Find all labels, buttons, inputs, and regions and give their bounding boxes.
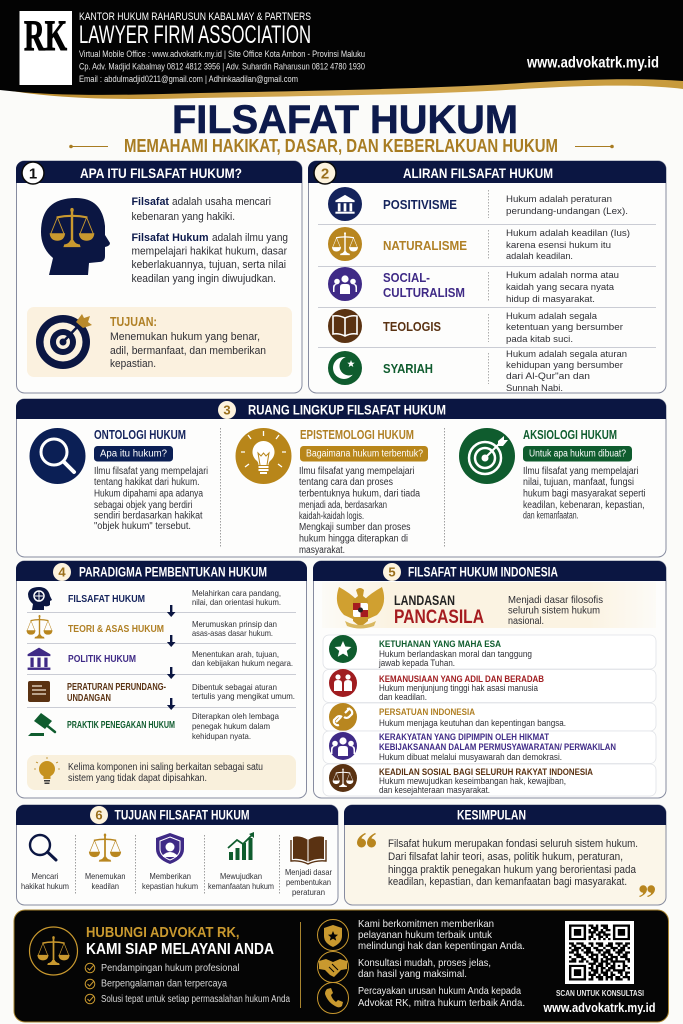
row: praktik penegakan: penegak hukum dalam <box>192 721 270 731</box>
commitment text: dan hasil yang maksimal. <box>358 968 467 980</box>
title: FILSAFAT HUKUM <box>172 98 518 142</box>
conclusion text: Filsafat hukum merupakan fondasi seluruh sistem hukum. <box>388 838 638 850</box>
firm name: KANTOR HUKUM RAHARUSUN KABALMAY & PARTNERS <box>79 11 311 23</box>
sila 5: dan kesejahteraan masyarakat. <box>379 785 490 795</box>
subtitle: MEMAHAMI HAKIKAT, DASAR, DAN KEBERLAKUAN HUKUM <box>124 135 558 156</box>
goal: kepastian hukum: Memberikan <box>150 871 191 881</box>
badge 3 <box>218 401 236 419</box>
definition text: kebenaran yang hakiki. <box>132 211 235 223</box>
row: teori dan asas: Merumuskan prinsip dan <box>192 619 277 629</box>
sila 4 <box>323 731 656 764</box>
sila 5: KEADILAN SOSIAL BAGI SELURUH RAKYAT INDONESIA <box>379 767 593 778</box>
pancasila description: seluruh sistem hukum <box>508 604 600 616</box>
row: politik hukum: dan kebijakan hukum negara. <box>192 658 293 668</box>
row: syariah <box>328 349 627 394</box>
goal: dasar pembentukan: pembentukan <box>286 877 331 887</box>
row: positivisme: perundang-undangan (Lex). <box>506 206 628 217</box>
pancasila description: nasional. <box>508 615 544 627</box>
arrows between rows <box>167 605 176 710</box>
commitment text: Percayakan urusan hukum Anda kepada <box>358 985 521 997</box>
row: naturalisme: adalah keadilan. <box>506 251 573 262</box>
column: ontologi: tentang hakikat dari hukum. <box>94 477 200 488</box>
goal: dasar pembentukan: peraturan <box>292 887 325 897</box>
row: teologis: ketentuan yang bersumber <box>506 322 623 333</box>
column: aksiologi: Ilmu filsafat yang mempelajari <box>523 466 638 477</box>
sila 2 <box>323 669 656 702</box>
note box <box>27 755 296 790</box>
row: peraturan perundang-undangan: PERATURAN PERUNDANG- <box>67 682 166 693</box>
goal: dasar pembentukan: Menjadi dasar <box>285 867 332 877</box>
call to action heading: KAMI SIAP MELAYANI ANDA <box>86 941 274 958</box>
definition text: keadilan yang ingin diwujudkan. <box>132 273 276 285</box>
sila 2: KEMANUSIAAN YANG ADIL DAN BERADAB <box>379 674 544 685</box>
badge 6: 6 <box>95 808 103 822</box>
icon: handshake <box>318 952 348 982</box>
column: aksiologi: hukum bagi masyarakat seperti <box>523 488 646 500</box>
column: epistemologi: Ilmu filsafat yang mempelajari <box>299 466 414 477</box>
column: epistemologi: masyarakat. <box>299 545 345 556</box>
heading: KESIMPULAN <box>457 806 526 822</box>
icon: garuda <box>337 587 384 628</box>
panel 3: ruang lingkup <box>16 399 666 557</box>
row: teologis <box>328 309 623 345</box>
row: filsafat hukum <box>28 587 281 610</box>
definition text: adalah usaha mencari <box>172 196 271 208</box>
heading: FILSAFAT HUKUM INDONESIA <box>408 564 558 580</box>
row: naturalisme: karena esensi hukum itu <box>506 240 611 251</box>
landasan pancasila <box>394 592 484 628</box>
definition text: adalah ilmu yang <box>212 232 288 244</box>
column: epistemologi <box>236 428 428 556</box>
panel 5: filsafat hukum indonesia <box>313 561 666 798</box>
badge 2 <box>314 162 336 184</box>
conclusion text: hingga praktik penegakan hukum yang berorientasi pada <box>388 864 636 876</box>
header band <box>0 0 683 99</box>
conclusion text: keadilan, kepastian, dan kemanfaatan bagi masyarakat. <box>388 876 627 888</box>
note box: Kelima komponen ini saling berkaitan sebagai satu <box>68 762 263 773</box>
sila 1: KETUHANAN YANG MAHA ESA <box>379 639 501 650</box>
goal: kemanfaatan: Mewujudkan <box>220 871 262 881</box>
sila 5 <box>323 764 656 796</box>
row: social-culturalism: SOCIAL- <box>383 270 430 285</box>
column: epistemologi: tentang cara dan proses <box>299 477 393 488</box>
checklist <box>85 963 290 1005</box>
tujuan box: Menemukan hukum yang benar, <box>110 331 260 343</box>
badge 5 <box>383 563 401 581</box>
icon: target <box>36 314 92 369</box>
badge 1: 1 <box>29 166 37 182</box>
row: teori dan asas <box>26 615 277 639</box>
column: aksiologi: keadilan, kebenaran, kepastian, <box>523 500 644 511</box>
panel 6: tujuan filsafat hukum <box>16 805 338 905</box>
row: positivisme: POSITIVISME <box>383 197 457 212</box>
column: ontologi <box>30 428 208 532</box>
row: peraturan perundang-undangan: UNDANGAN <box>67 693 111 704</box>
row: filsafat hukum: nilai, dan orientasi hukum. <box>192 597 281 607</box>
badge 5: 5 <box>388 564 396 580</box>
row: naturalisme: Hukum adalah keadilan (Ius) <box>506 228 630 239</box>
icon: scales circle <box>30 927 78 975</box>
tujuan box: kepastian. <box>110 358 156 370</box>
heading: ALIRAN FILSAFAT HUKUM <box>403 165 553 181</box>
row: syariah: Sunnah Nabi. <box>506 383 563 394</box>
column: aksiologi <box>459 428 646 522</box>
heading: TUJUAN FILSAFAT HUKUM <box>114 806 250 822</box>
goal: mencari hakikat: Mencari <box>32 871 59 881</box>
definition text <box>132 196 288 285</box>
row: social-culturalism: kaidah yang secara nyata <box>506 282 615 293</box>
logo: RK <box>24 13 67 60</box>
contact details: Virtual Mobile Office : www.advokatrk.my.id | Site Office Kota Ambon - Provinsi Maluku <box>79 49 365 60</box>
row: peraturan perundang-undangan: tertulis yang mengikat umum. <box>192 691 295 701</box>
row: praktik penegakan: Diterapkan oleh lembaga <box>192 711 279 721</box>
row: teori dan asas: TEORI & ASAS HUKUM <box>68 623 164 635</box>
checklist: Pendampingan hukum profesional <box>101 963 240 974</box>
commitment text: Kami berkomitmen memberikan <box>358 918 494 930</box>
sila 3 <box>323 703 656 731</box>
row: social-culturalism: hidup di masyarakat. <box>506 294 595 305</box>
sila 2: Hukum menjunjung tinggi hak asasi manusia <box>379 683 538 693</box>
scan caption: SCAN UNTUK KONSULTASI <box>556 988 644 998</box>
badge 3: 3 <box>223 402 231 418</box>
logo <box>20 11 72 85</box>
icon: shield <box>318 920 348 950</box>
column: ontologi: Ilmu filsafat yang mempelajari <box>94 466 208 477</box>
badge 4 <box>53 563 71 581</box>
goal: kemanfaatan: kemanfaatan hukum <box>208 881 274 891</box>
goal: kepastian hukum: kepastian hukum <box>142 881 198 891</box>
column: aksiologi: nilai, tujuan, manfaat, fungsi <box>523 477 634 488</box>
column: epistemologi: Bagaimana hukum terbentuk? <box>306 448 423 460</box>
definition text: mempelajari hakikat hukum, dasar <box>132 246 287 258</box>
badge 4: 4 <box>58 564 66 580</box>
landasan pancasila: LANDASAN <box>394 592 455 608</box>
sila 1 <box>323 635 656 669</box>
column: ontologi: Apa itu hukum? <box>100 448 167 460</box>
sila 4: KERAKYATAN YANG DIPIMPIN OLEH HIKMAT <box>379 732 549 743</box>
sila 3: Hukum menjaga keutuhan dan kepentingan bangsa. <box>379 718 566 728</box>
icon: closing quote <box>639 885 655 897</box>
column: ontologi: "objek hukum" tersebut. <box>94 521 191 532</box>
commitment text: melindungi hak dan kepentingan Anda. <box>358 940 525 952</box>
column: epistemologi: hukum hingga diterapkan di <box>299 534 408 544</box>
badge 6 <box>90 806 108 824</box>
call to action heading <box>86 924 274 958</box>
row: filsafat hukum: Melahirkan cara pandang, <box>192 588 281 598</box>
firm name: LAWYER FIRM ASSOCIATION <box>79 21 311 49</box>
column: epistemologi: menjadi ada, berdasarkan <box>299 500 387 511</box>
row: teologis: Hukum adalah segala <box>506 311 598 322</box>
commitment text <box>358 918 525 1009</box>
panel 1: apa itu filsafat hukum <box>16 161 302 393</box>
column: epistemologi: EPISTEMOLOGI HUKUM <box>300 428 414 442</box>
panel 2: aliran filsafat hukum <box>308 161 666 394</box>
commitment text: Advokat RK, mitra hukum terbaik Anda. <box>358 997 525 1009</box>
row: syariah: Hukum adalah segala aturan <box>506 349 627 360</box>
row: peraturan perundang-undangan: Dibentuk sebagai aturan <box>192 682 277 692</box>
badge 1 <box>22 162 44 184</box>
definition text: keberlakuannya, tujuan, serta nilai <box>132 259 286 271</box>
row: syariah: kehidupan yang bersumber <box>506 360 623 371</box>
row: syariah: dari Al-Qur"an dan <box>506 371 590 382</box>
note box: sistem yang tidak dapat dipisahkan. <box>68 773 207 784</box>
goal: kemanfaatan <box>208 832 274 891</box>
sila 1: jawab kepada Tuhan. <box>378 658 455 668</box>
goal: dasar pembentukan <box>285 836 332 897</box>
column: epistemologi: terbentuknya hukum, dari tiada <box>299 488 420 500</box>
icon: opening quote <box>357 833 376 848</box>
contact details <box>79 49 365 85</box>
commitment text: pelayanan hukum terbaik untuk <box>358 929 493 941</box>
heading: RUANG LINGKUP FILSAFAT HUKUM <box>248 402 446 418</box>
footer website: www.advokatrk.my.id <box>543 1000 656 1015</box>
conclusion text <box>388 838 638 888</box>
footer band <box>14 910 668 1022</box>
checklist: Solusi tepat untuk setiap permasalahan hukum Anda <box>101 994 290 1005</box>
row: teori dan asas: asas-asas dasar hukum. <box>192 628 273 638</box>
call to action heading: HUBUNGI ADVOKAT RK, <box>86 924 240 941</box>
row: praktik penegakan: kehidupan nyata. <box>192 731 251 741</box>
goal: menemukan keadilan: keadilan <box>92 881 119 891</box>
row: social-culturalism: CULTURALISM <box>383 285 465 300</box>
column: ontologi: sebagai objek yang berdiri <box>94 500 192 511</box>
sila 2: dan keadilan. <box>379 692 427 702</box>
heading: APA ITU FILSAFAT HUKUM? <box>80 165 242 181</box>
sila 5: Hukum mewujudkan keseimbangan hak, kewajiban, <box>379 776 566 786</box>
column: aksiologi: dan kemanfaatan. <box>523 510 578 522</box>
website: www.advokatrk.my.id <box>526 54 659 72</box>
sila 1: Hukum berlandaskan moral dan tanggung <box>379 649 532 659</box>
row: peraturan perundang-undangan <box>28 681 295 704</box>
pancasila description: Menjadi dasar filosofis <box>508 594 603 606</box>
sila 3: PERSATUAN INDONESIA <box>379 707 475 718</box>
row: filsafat hukum: FILSAFAT HUKUM <box>68 593 145 605</box>
icon: head with scales <box>41 198 110 275</box>
column: ontologi: Hukum dipahami apa adanya <box>94 488 203 500</box>
landasan pancasila: PANCASILA <box>394 606 484 628</box>
column: ontologi: sendiri berdasarkan hakikat <box>94 510 203 522</box>
row: social-culturalism: Hukum adalah norma atau <box>506 270 619 281</box>
icon: phone <box>318 982 348 1014</box>
column: aksiologi: Untuk apa hukum dibuat? <box>529 448 626 460</box>
sila 4: KEBIJAKSANAAN DALAM PERMUSYAWARATAN/ PERWAKILAN <box>379 742 616 753</box>
goal: kepastian hukum <box>142 833 198 891</box>
firm name <box>79 11 311 49</box>
tujuan box: adil, bermanfaat, dan memberikan <box>110 345 266 357</box>
row: syariah: SYARIAH <box>383 361 433 376</box>
checklist: Berpengalaman dan terpercaya <box>101 978 228 990</box>
row: praktik penegakan: PRAKTIK PENEGAKAN HUKUM <box>67 720 175 731</box>
goal: menemukan keadilan: Menemukan <box>85 871 126 881</box>
column: epistemologi: kaidah-kaidah logis. <box>299 511 364 522</box>
goal: menemukan keadilan <box>85 834 126 891</box>
row: positivisme: Hukum adalah peraturan <box>506 194 612 205</box>
row: praktik penegakan <box>28 711 279 741</box>
row: naturalisme <box>328 227 630 262</box>
heading: PARADIGMA PEMBENTUKAN HUKUM <box>79 564 267 580</box>
row: social-culturalism <box>328 267 619 305</box>
tujuan box: TUJUAN: <box>110 314 157 329</box>
row: politik hukum <box>28 648 293 670</box>
row: teologis: pada kitab suci. <box>506 334 573 345</box>
definition text: Filsafat <box>132 196 169 208</box>
row: teologis: TEOLOGIS <box>383 319 441 334</box>
column: aksiologi: AKSIOLOGI HUKUM <box>523 428 617 442</box>
qr code <box>565 921 634 984</box>
goal: mencari hakikat: hakikat hukum <box>21 881 69 891</box>
goal: mencari hakikat <box>21 835 69 891</box>
sila 4: Hukum dibuat melalui musyawarah dan demokrasi. <box>379 752 562 762</box>
row: politik hukum: POLITIK HUKUM <box>68 653 136 665</box>
pancasila description <box>508 594 603 627</box>
commitment text: Konsultasi mudah, proses jelas, <box>358 957 491 969</box>
row: positivisme <box>328 187 628 221</box>
column: ontologi: ONTOLOGI HUKUM <box>94 428 186 442</box>
panel: kesimpulan <box>344 805 666 905</box>
conclusion text: Dari filsafat lahir teori, asas, politik hukum, peraturan, <box>388 851 623 863</box>
row: politik hukum: Menentukan arah, tujuan, <box>192 649 279 659</box>
contact details: Cp. Adv. Madjid Kabalmay 0812 4812 3956 | Adv. Suhardin Raharusun 0812 4780 1930 <box>79 62 365 72</box>
tujuan box <box>27 307 292 377</box>
column: epistemologi: Mengkaji sumber dan proses <box>299 522 410 533</box>
icon: bulb <box>34 757 60 784</box>
badge 2: 2 <box>321 166 329 182</box>
definition text: Filsafat Hukum <box>132 232 209 244</box>
row: naturalisme: NATURALISME <box>383 238 467 253</box>
contact details: Email : abdulmadjid0211@gmail.com | Adhinkaadilan@gmail.com <box>79 74 298 85</box>
panel 4: paradigma pembentukan hukum <box>16 561 307 798</box>
